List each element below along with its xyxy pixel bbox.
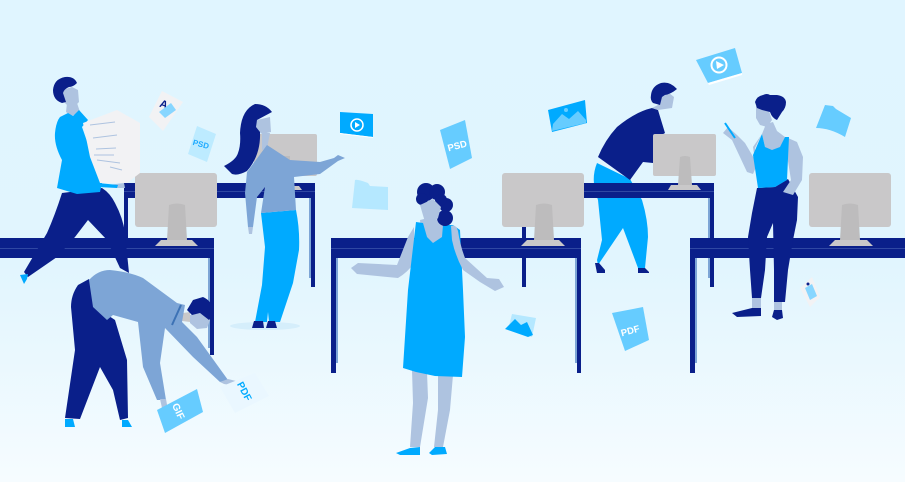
dress: [403, 222, 465, 377]
far arm: [783, 138, 803, 195]
shirt: [598, 108, 665, 180]
document: small resume: [800, 277, 820, 307]
back desk centre: [522, 183, 714, 287]
hair lobe: [416, 193, 428, 205]
pants: [594, 163, 648, 268]
document: PSD small: PSD: [192, 138, 210, 151]
collar line: [172, 305, 181, 325]
shoe: [638, 268, 649, 273]
far hand: [108, 183, 125, 188]
document: PDF right: PDF: [620, 324, 641, 339]
back desk left: [124, 183, 315, 287]
document: PDF right: [612, 307, 649, 351]
monitor centre: [502, 173, 584, 246]
woman in dress: [351, 183, 504, 455]
face: [62, 87, 79, 106]
face: [255, 117, 271, 134]
icon: video left: [340, 112, 373, 138]
shoe: [20, 274, 28, 284]
shirt: [55, 110, 102, 194]
hand left: [248, 227, 253, 234]
neck: [262, 133, 270, 150]
face: [190, 313, 210, 329]
hair: [755, 94, 786, 120]
phone: [725, 123, 735, 138]
shoes: [595, 263, 605, 273]
document: PSD large: PSD: [447, 139, 468, 154]
woman with phone: [723, 94, 803, 320]
socks: [752, 296, 782, 311]
hair: [187, 297, 213, 320]
pants: [255, 210, 299, 322]
document: GIF: GIF: [169, 402, 186, 422]
chest and neck: [762, 122, 785, 151]
left arm: [351, 227, 414, 278]
icon: folder right: [816, 105, 851, 137]
document: GIF: [157, 389, 203, 433]
document: A letter: [149, 91, 183, 131]
hair lobe: [417, 183, 435, 201]
hand left: [160, 399, 168, 410]
left leg: [410, 370, 428, 447]
chest: [420, 218, 448, 247]
hair lobe: [439, 198, 453, 212]
hair lobe: [435, 194, 447, 206]
near arm: [723, 127, 762, 174]
icon: video right: [696, 48, 742, 85]
right leg: [434, 374, 453, 447]
top: [245, 145, 345, 227]
face: [420, 199, 441, 225]
monitor right: [809, 173, 891, 246]
shirt: [89, 270, 228, 400]
shoes: [732, 308, 783, 320]
hair: [416, 183, 453, 226]
document: PDF left: [220, 373, 269, 413]
man carrying paper stack: [20, 77, 140, 284]
neck: [182, 312, 190, 322]
hair lobe: [429, 184, 445, 200]
man bending over: [65, 270, 236, 427]
top: [753, 134, 789, 188]
neck: [66, 103, 80, 116]
document: PDF left: PDF: [234, 380, 253, 403]
document: PSD small: [188, 126, 216, 162]
back monitor left: [254, 134, 317, 190]
arm: [62, 152, 118, 188]
icon: folder light: [352, 180, 388, 210]
monitor left: [135, 173, 217, 246]
shoes: [65, 419, 132, 427]
right arm: [451, 226, 504, 291]
front desk right: [690, 238, 905, 373]
shadow: [230, 322, 300, 330]
neck and face: [652, 93, 674, 110]
shoes: [396, 447, 447, 455]
woman with long hair: [224, 104, 345, 330]
hair: [651, 83, 677, 105]
shoes: [252, 321, 277, 328]
front desk left: [0, 238, 214, 355]
pants: [24, 188, 129, 277]
man leaning over desk: [594, 83, 677, 273]
icon: image top: [548, 100, 587, 132]
front desk centre: [331, 238, 581, 373]
document: A letter: A: [158, 98, 169, 112]
hair: [53, 77, 77, 103]
hair lobe: [437, 210, 453, 226]
hair: [224, 104, 272, 175]
paper stack: [83, 110, 140, 183]
face: [756, 106, 772, 127]
icon: image small: [505, 314, 536, 337]
document: PSD large: [440, 120, 472, 169]
pants: [65, 279, 128, 420]
hand right: [220, 379, 236, 385]
back monitor right: [653, 134, 716, 190]
paper lines: [90, 122, 122, 170]
pants: [748, 179, 798, 302]
